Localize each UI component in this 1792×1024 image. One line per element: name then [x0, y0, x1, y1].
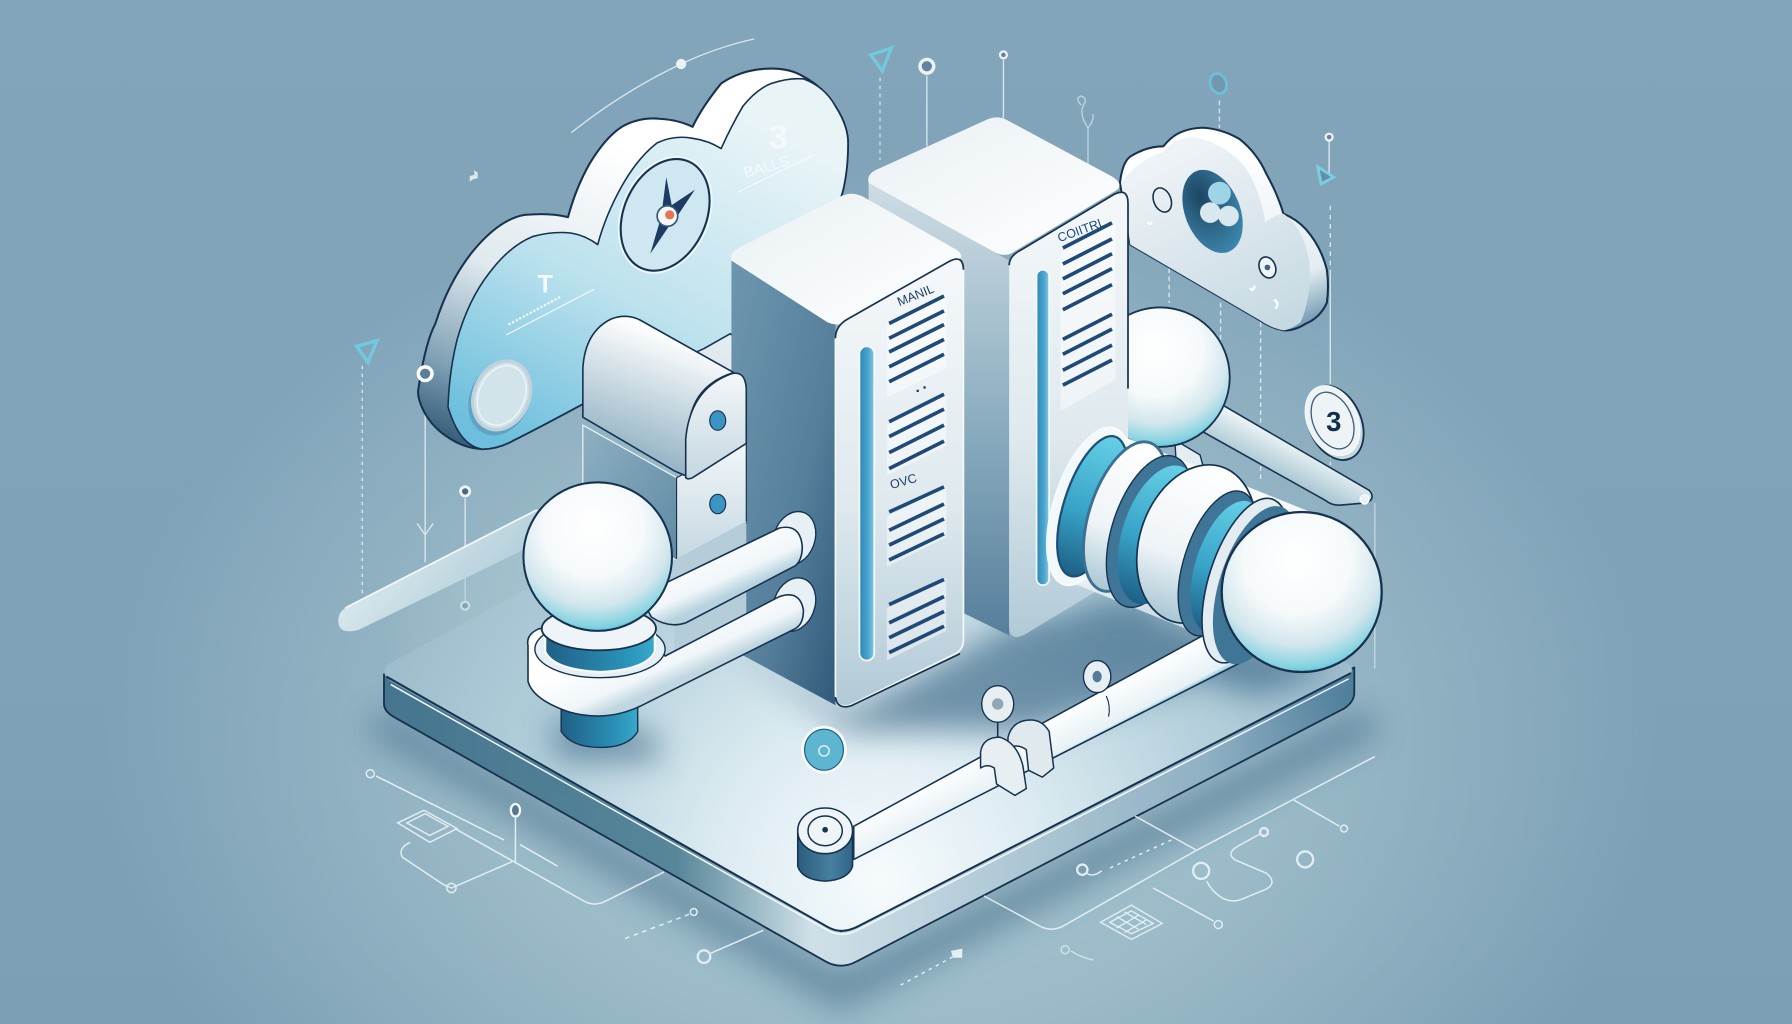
line node	[1214, 921, 1222, 929]
cloud button	[457, 352, 542, 445]
clamp rear	[1008, 720, 1054, 777]
dotted trace node	[1077, 865, 1087, 875]
cloud: right small with three dots	[1120, 128, 1328, 330]
lower flange	[766, 572, 823, 637]
status slot	[1037, 270, 1049, 585]
floor pipe with clamp	[798, 631, 1240, 881]
dotted front	[901, 955, 955, 985]
blue band two	[1162, 481, 1279, 646]
marker: cyan triangle with dotted line	[871, 48, 891, 160]
marker: ring with line	[920, 59, 934, 146]
base cylinder	[561, 699, 638, 747]
server front edge lines	[835, 259, 963, 707]
dotted line	[623, 914, 689, 939]
end ring	[1184, 488, 1316, 675]
branch with node	[1294, 800, 1339, 826]
line to node	[1153, 888, 1214, 921]
cloud label BALLS: BALLS	[742, 153, 791, 182]
faint wiggle	[1071, 951, 1094, 960]
upper rounded body	[583, 316, 734, 478]
collar opening	[535, 621, 665, 678]
grid chip	[1101, 905, 1162, 939]
ring one	[1030, 417, 1148, 595]
loop node top	[1260, 828, 1268, 836]
pin	[511, 804, 520, 817]
status slot	[859, 346, 874, 661]
blue neck	[545, 631, 655, 672]
status dot upper	[710, 411, 726, 430]
dotted trace	[1106, 840, 1171, 870]
upper front	[686, 373, 746, 479]
cloud side	[1120, 128, 1328, 330]
knob right	[1083, 661, 1111, 693]
trace with node	[376, 776, 504, 840]
dark disc with three dots	[1171, 161, 1254, 262]
upper right sphere	[1090, 307, 1230, 480]
dashed verticals right of server	[1169, 269, 1261, 480]
faint node	[1061, 946, 1069, 954]
chip outline	[398, 810, 457, 842]
tiny glyph	[951, 949, 962, 958]
ring line	[711, 930, 763, 953]
pipe	[854, 631, 1240, 859]
loop trace	[1207, 834, 1272, 901]
knob left	[982, 686, 1014, 741]
dotted hook	[1087, 871, 1102, 875]
cloud face	[1121, 137, 1310, 330]
coin with number 3	[1295, 377, 1375, 469]
dotted node	[690, 909, 697, 915]
pipe joint	[1106, 696, 1109, 717]
coin with number 3: 3	[1326, 406, 1341, 437]
server front left face	[731, 258, 835, 705]
cloud label 3: 3	[769, 119, 788, 157]
cloud fine print	[506, 289, 594, 335]
upper pipe	[640, 527, 802, 625]
blue band	[1089, 445, 1216, 618]
neck ring	[542, 607, 656, 650]
branch node	[1341, 825, 1347, 832]
cloud label underline	[738, 155, 813, 192]
marker: sprout with line	[1078, 96, 1093, 167]
ring two	[1067, 431, 1185, 602]
line with arrow below cloud	[417, 384, 433, 562]
vents	[1061, 222, 1115, 411]
server back edge line	[1009, 192, 1128, 389]
collar arm and lower pipe	[528, 595, 803, 716]
marker: blue ring with dashes	[1207, 71, 1229, 128]
vertical with pin	[514, 817, 516, 862]
platform side	[384, 667, 1354, 966]
server front top	[731, 194, 961, 325]
large sphere	[1222, 512, 1382, 672]
server back front	[1009, 192, 1128, 637]
stacked device	[583, 316, 746, 657]
left back rail	[338, 510, 571, 669]
vents	[887, 295, 946, 661]
left sphere	[523, 482, 672, 631]
small glyph	[470, 170, 478, 182]
upper flange	[766, 505, 823, 571]
long trace	[984, 757, 1375, 929]
marker: left triangle with dashes	[357, 341, 377, 594]
clock dial	[601, 142, 729, 288]
platform top	[385, 417, 1352, 931]
cloud front face	[448, 79, 848, 449]
tiny specks	[1147, 222, 1277, 309]
floor shadows	[549, 594, 1337, 760]
branch	[1135, 816, 1197, 850]
tiny dots	[917, 387, 926, 391]
marker: small dot with line	[1000, 51, 1007, 119]
short line	[520, 845, 558, 866]
platform	[384, 417, 1354, 966]
status dot lower	[710, 494, 726, 514]
cloud label T: T	[537, 271, 553, 299]
floor button	[801, 726, 847, 774]
back right bar	[1183, 389, 1375, 669]
lower box front	[677, 441, 746, 562]
node	[366, 770, 374, 778]
small ellipse	[1150, 185, 1175, 215]
arc with node	[571, 39, 754, 133]
small knob	[1256, 254, 1279, 280]
cloud thickness	[418, 69, 848, 449]
loop trace	[401, 842, 512, 888]
server back left face	[869, 181, 1009, 635]
cloud: left large with clock	[418, 69, 848, 449]
lower box strip	[674, 521, 746, 657]
circuit traces lower right	[901, 757, 1375, 985]
cylinder core	[1061, 434, 1330, 664]
loop node bottom	[1193, 863, 1209, 879]
trace long	[455, 829, 664, 904]
marker: right triangle and vertical line	[1318, 134, 1334, 466]
ring node	[698, 950, 710, 963]
server back	[868, 117, 1128, 637]
server front face	[835, 259, 963, 706]
marker: ring on cloud edge	[418, 367, 432, 381]
server front label OVC: OVC	[888, 471, 918, 492]
ringed cylinder and large sphere	[1030, 417, 1382, 675]
marker: node pair	[461, 487, 470, 610]
server back top	[868, 117, 1119, 255]
decorative connector lines upper area	[357, 39, 1334, 610]
pipes left	[523, 482, 823, 747]
server back label: COIITRL	[1056, 215, 1107, 245]
white body	[1117, 449, 1276, 639]
server front	[731, 194, 963, 707]
platform shadow	[366, 709, 1383, 1011]
loop node	[447, 883, 456, 893]
clamp front	[981, 737, 1026, 795]
ring	[1297, 851, 1313, 867]
circuit traces lower left	[366, 770, 763, 963]
server front label MANIL: MANIL	[895, 282, 936, 309]
lower box side	[583, 425, 677, 560]
end cap	[798, 808, 853, 881]
